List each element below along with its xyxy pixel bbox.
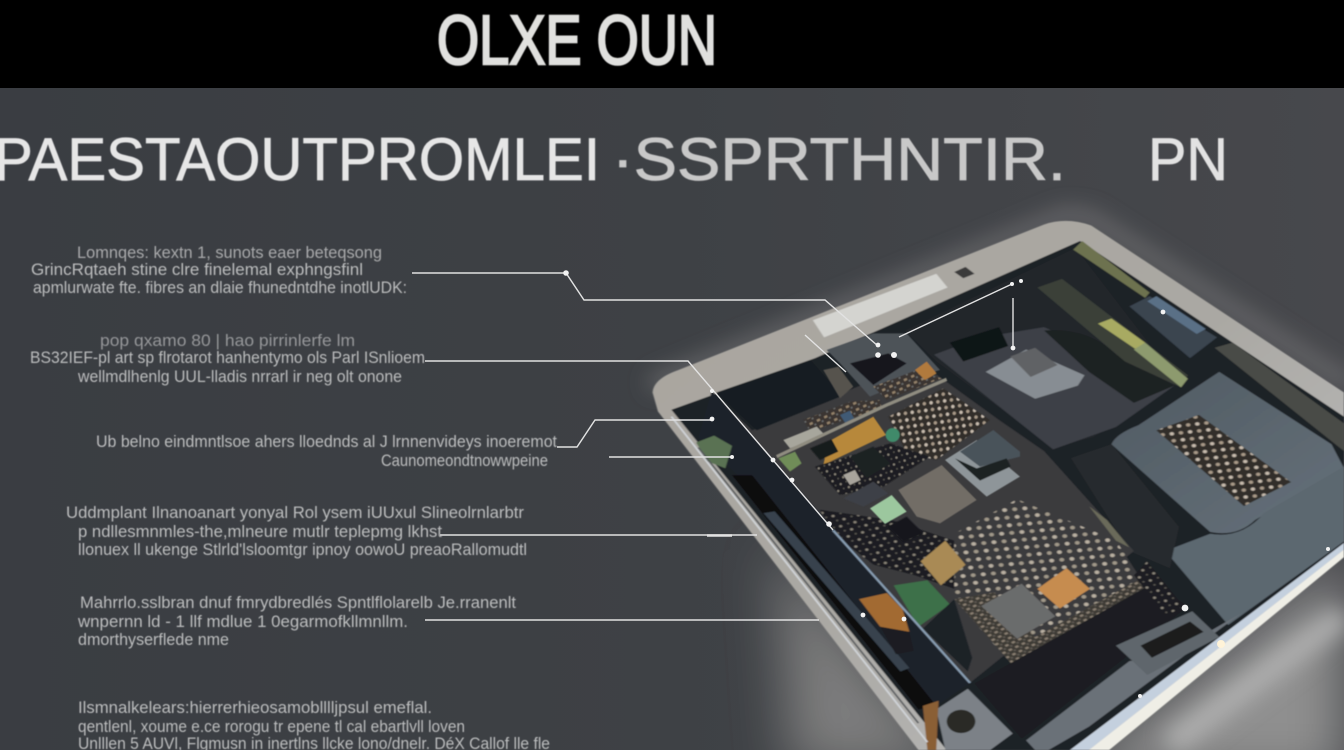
pale flex border bbox=[1134, 343, 1188, 387]
dark lower-left speckled cluster bbox=[820, 510, 954, 589]
gold chip bbox=[823, 417, 886, 465]
leader 6 bbox=[425, 619, 819, 621]
panel left of bottom bbox=[923, 599, 972, 671]
title: OLXE OUN bbox=[437, 1, 717, 79]
top right flex connector bbox=[1037, 279, 1188, 387]
text block 3: Caunomeondtnowwpeine bbox=[381, 451, 548, 470]
central black channel bbox=[1071, 444, 1179, 568]
glow band bottom right bbox=[1170, 615, 1344, 745]
text block 5: wnpernn ld - 1 llf mdlue 1 0egarmofkllmnllm. bbox=[77, 612, 408, 631]
connector block bbox=[950, 327, 1008, 362]
top black compartment bbox=[905, 248, 1179, 448]
small component row bbox=[1134, 561, 1183, 616]
text block 4: p ndllesmnmles-the,mlneure mutlr teplepmg lkhst bbox=[78, 522, 442, 541]
brushed metal shield bbox=[898, 465, 977, 523]
device glow bbox=[775, 545, 1344, 750]
leader 1 bbox=[412, 273, 878, 346]
device silver shell bbox=[653, 221, 1344, 750]
bottom black panel bbox=[975, 584, 1188, 739]
copper flex shadow bbox=[880, 627, 914, 654]
leader 2 bbox=[425, 361, 833, 530]
left chrome line bbox=[671, 417, 927, 742]
green cap bbox=[886, 428, 900, 442]
text block 2: pop qxamo 80 | hao pirrinlerfe lm bbox=[100, 331, 355, 350]
leader 3 bbox=[557, 420, 712, 447]
text block 2: wellmdlhenlg UUL-lladis nrrarl ir neg olt onone bbox=[77, 367, 402, 386]
speckled cluster bbox=[815, 443, 930, 495]
front camera bbox=[954, 267, 975, 278]
leader 5 bbox=[440, 534, 757, 536]
blue flex highlights bbox=[1147, 296, 1206, 334]
leader 8 bbox=[899, 284, 1012, 337]
copper flex bbox=[859, 593, 909, 632]
upper left black panel bbox=[716, 360, 842, 430]
subtitle: PAESTAOUTPROMLEI bbox=[0, 126, 600, 193]
text block 6: Ilsmnalkelears:hierrerhieosamoblllljpsul emeflal. bbox=[78, 698, 432, 717]
bracket light frame bbox=[945, 440, 1020, 497]
bracket inner dark bbox=[955, 458, 1011, 481]
left silver groove bbox=[698, 448, 918, 723]
left side slot inner bbox=[763, 511, 909, 671]
camera module bbox=[986, 349, 1085, 399]
gold connector bbox=[921, 541, 966, 585]
black camera channel bbox=[1044, 330, 1174, 403]
leader 4 bbox=[609, 456, 732, 458]
green board bottom bbox=[894, 580, 950, 627]
bottom grey plate bbox=[1026, 613, 1242, 750]
black IC left bbox=[810, 439, 838, 460]
text block 5: dmorthyserflede nme bbox=[78, 630, 229, 649]
lower fine components bbox=[954, 575, 1152, 670]
grey component block bbox=[827, 333, 940, 397]
bottom mount bbox=[936, 689, 1013, 750]
text block 1: Lomnqes: kextn 1, sunots eaer beteqsong bbox=[77, 243, 382, 262]
left side slot bbox=[732, 475, 936, 709]
text block 1: GrincRqtaeh stine clre finelemal exphngsfinl bbox=[31, 260, 363, 279]
bracket plate bbox=[960, 430, 1020, 467]
brown components bbox=[873, 370, 942, 400]
upper dotted chips bbox=[888, 388, 990, 460]
USB connector bbox=[1116, 611, 1219, 675]
text block 3 bbox=[96, 432, 557, 470]
text block 6: qentlenl, xoume e.ce rorogu tr epene tl cal ebartlvll loven bbox=[78, 717, 465, 736]
chrome edge outer bbox=[1089, 550, 1344, 750]
blue edge line bbox=[833, 530, 970, 683]
chrome edge inner bbox=[1070, 543, 1344, 750]
text block 3: Ub belno eindmntlsoe ahers lloednds al J lrnnenvideys inoeremot bbox=[96, 432, 557, 451]
right chip strip bbox=[1089, 506, 1129, 548]
device: exploded smartphone circuit board bbox=[653, 221, 1344, 750]
grey camera plate bbox=[934, 327, 1174, 449]
text block 5: Mahrrlo.sslbran dnuf fmrydbredlés Spntlflolarelb Je.rranenlt bbox=[80, 593, 516, 612]
orange socket bbox=[915, 362, 937, 380]
text block 4 bbox=[66, 503, 527, 559]
grey shield square bbox=[981, 584, 1055, 639]
green square left bbox=[778, 452, 802, 472]
white speaker strip bbox=[813, 274, 948, 337]
leader 5 thick segment bbox=[707, 534, 732, 537]
text block 4: llonuex ll ukenge Stlrld'lsloomtgr ipnoy oowoU preaoRallomudtl bbox=[78, 540, 527, 559]
dark inner cavity bbox=[671, 241, 1344, 750]
brown textured band bbox=[803, 400, 882, 432]
black IC lower bbox=[888, 517, 923, 542]
leader 9 bbox=[1012, 298, 1014, 348]
green chip bbox=[870, 495, 907, 524]
marker dots bbox=[563, 270, 1330, 698]
black IC top bbox=[850, 353, 907, 385]
right edge strip bbox=[1215, 343, 1344, 451]
blue flex strip bbox=[1129, 296, 1217, 358]
green flex top bbox=[1073, 241, 1150, 298]
lower right grey plate bbox=[1165, 467, 1344, 625]
header band bbox=[0, 0, 1344, 88]
socket contact field bbox=[1156, 415, 1291, 506]
yellow flex strip bbox=[1098, 318, 1145, 349]
subtitle: ·SSPRTHNTIR. bbox=[612, 126, 1066, 193]
subtitle: PN bbox=[1148, 126, 1228, 193]
board detail cluster bbox=[777, 333, 1020, 542]
USB port opening bbox=[1141, 622, 1203, 658]
silver blotch bbox=[783, 427, 825, 448]
long board rail bbox=[777, 379, 947, 457]
subtitle bbox=[0, 126, 1228, 193]
grey block lower bbox=[843, 482, 888, 507]
text block 2 bbox=[30, 331, 425, 386]
copper chip bbox=[1037, 568, 1090, 608]
text block 5 bbox=[77, 593, 516, 649]
leader 7 bbox=[805, 335, 846, 372]
text block 1: apmlurwate fte. fibres an dlaie fhunedntdhe inotlUDK: bbox=[33, 278, 407, 297]
left dark column bbox=[698, 391, 970, 706]
text block 4: Uddmplant Ilnanoanart yonyal Rol ysem iUUxul Slineolrnlarbtr bbox=[66, 503, 524, 522]
right grey pad bbox=[1111, 372, 1344, 533]
leader lines bbox=[412, 273, 1013, 620]
text block 6 bbox=[78, 698, 550, 750]
text block 1 bbox=[31, 243, 407, 297]
copper bracket bbox=[923, 701, 939, 750]
component row bbox=[823, 367, 853, 398]
silver small chip bbox=[843, 470, 861, 485]
left green part bbox=[696, 436, 732, 468]
text block 2: BS32IEF-pl art sp flrotarot hanhentymo ols Parl ISnlioem bbox=[30, 348, 425, 367]
black IC centre bbox=[850, 447, 891, 478]
base board bbox=[712, 362, 1134, 683]
blue component bbox=[840, 411, 854, 423]
glow along upper edges bbox=[650, 215, 1344, 385]
screw bbox=[947, 710, 975, 733]
camera module top bbox=[1010, 348, 1058, 377]
main solder ball field bbox=[954, 499, 1143, 668]
